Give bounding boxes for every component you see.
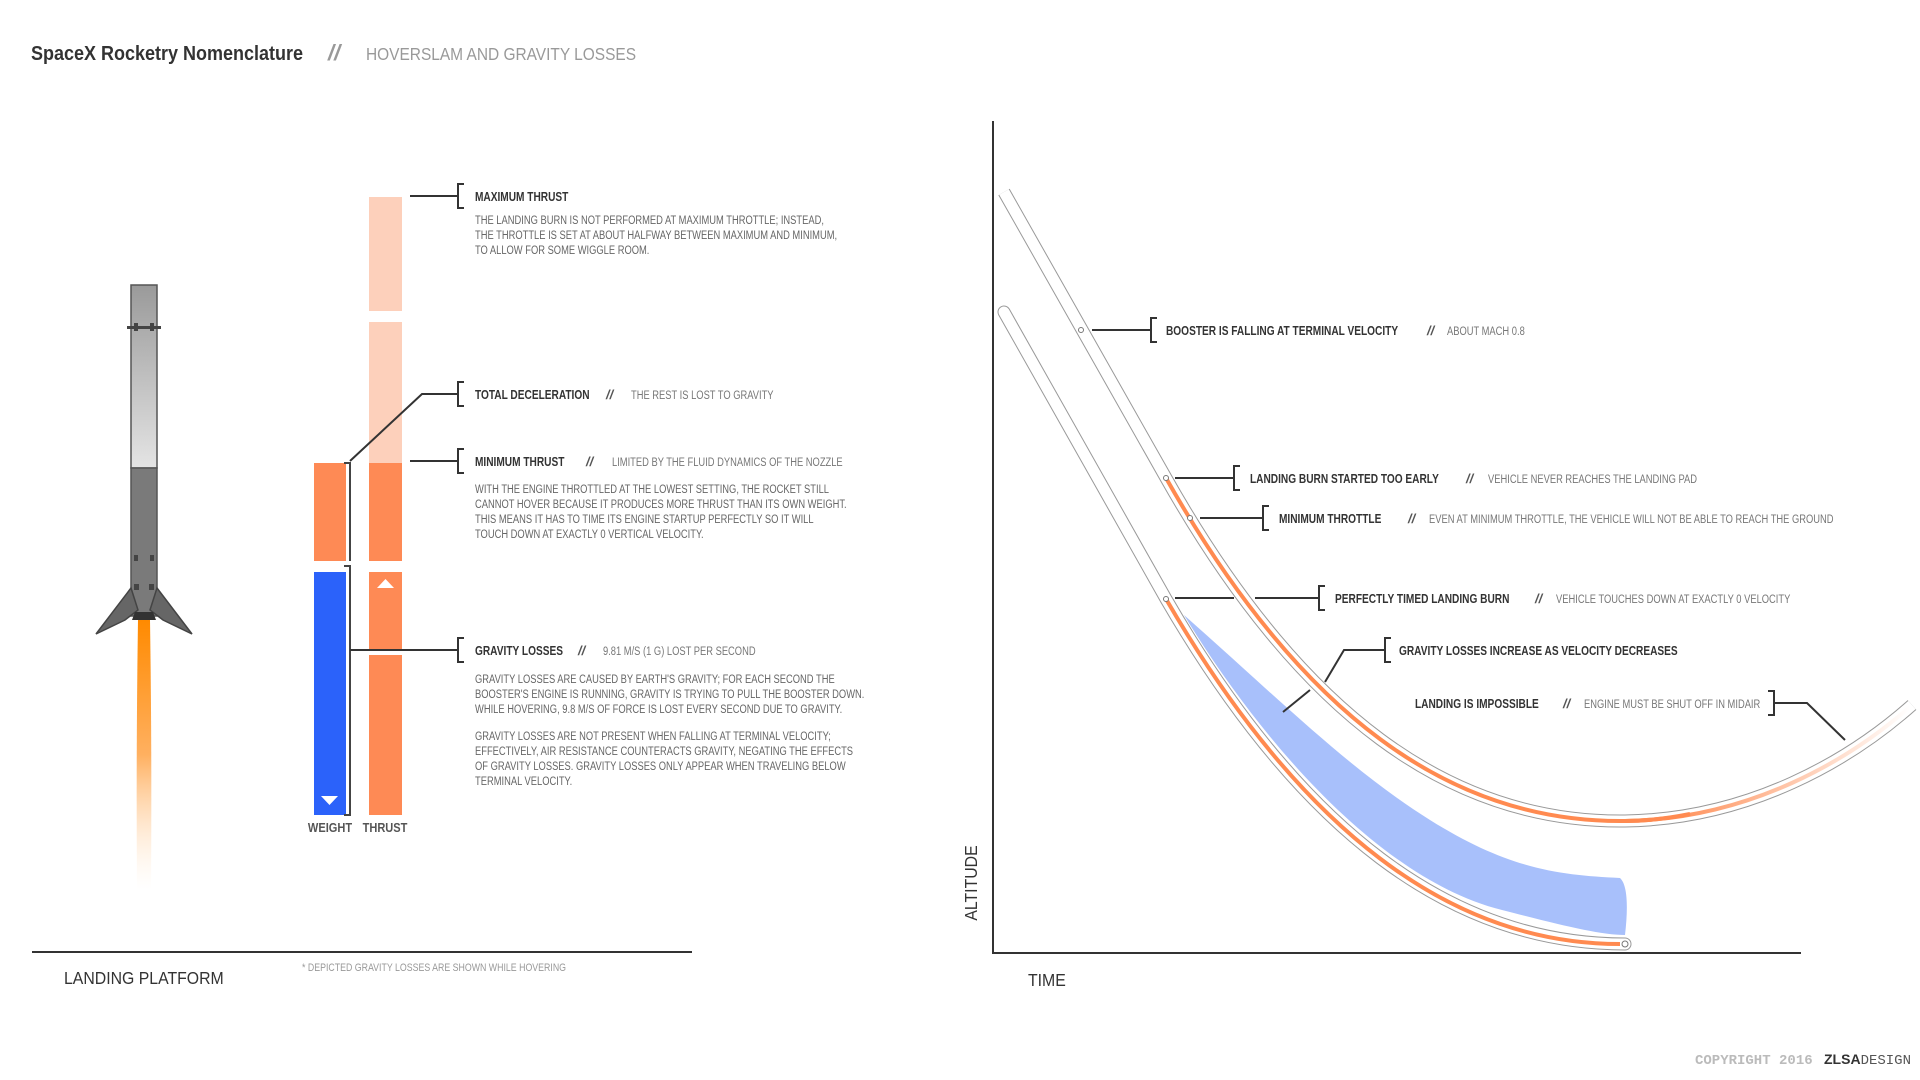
callout: minimum throttle: EVEN AT MINIMUM THROTTLE, THE VEHICLE WILL NOT BE ABLE TO REACH THE GROUND: [1429, 513, 1834, 526]
callout: gravity losses increase: GRAVITY LOSSES INCREASE AS VELOCITY DECREASES: [1399, 644, 1678, 658]
gravity loss area: [1184, 615, 1627, 935]
callout: booster terminal velocity: ABOUT MACH 0.8: [1447, 325, 1525, 338]
thrust column: [369, 197, 402, 815]
callout: total deceleration: THE REST IS LOST TO GRAVITY: [631, 389, 774, 402]
callout: maximum thrust: THE LANDING BURN IS NOT PERFORMED AT MAXIMUM THROTTLE; INSTEAD,: [475, 214, 824, 227]
callout: minimum throttle: MINIMUM THROTTLE: [1279, 512, 1382, 526]
callout: gravity losses: TERMINAL VELOCITY.: [475, 775, 572, 788]
callout: landing burn too early: VEHICLE NEVER REACHES THE LANDING PAD: [1488, 473, 1697, 486]
callout: landing burn too early: LANDING BURN STARTED TOO EARLY: [1250, 472, 1439, 486]
callout: minimum thrust: LIMITED BY THE FLUID DYNAMICS OF THE NOZZLE: [612, 456, 843, 469]
chart: altitude vs time: [961, 121, 1912, 990]
callout: booster terminal velocity: //: [1426, 323, 1436, 338]
callout: landing is impossible: [1415, 691, 1845, 740]
bar chart: weight vs thrust: THRUST: [363, 820, 408, 835]
copyright: ZLSADESIGN: [1824, 1051, 1911, 1069]
callout: landing is impossible: LANDING IS IMPOSSIBLE: [1415, 697, 1539, 711]
axes: [993, 121, 1801, 953]
callout: gravity losses: OF GRAVITY LOSSES. GRAVITY LOSSES ONLY APPEAR WHEN TRAVELING BELOW: [475, 760, 846, 773]
label: landing platform: LANDING PLATFORM: [64, 968, 224, 988]
axis label: altitude: ALTITUDE: [961, 845, 981, 921]
callout: booster terminal velocity: BOOSTER IS FALLING AT TERMINAL VELOCITY: [1166, 324, 1398, 338]
footnote: * DEPICTED GRAVITY LOSSES ARE SHOWN WHILE HOVERING: [302, 962, 566, 974]
callout: gravity losses: GRAVITY LOSSES ARE NOT PRESENT WHEN FALLING AT TERMINAL VELOCITY;: [475, 730, 831, 743]
callout: gravity losses: EFFECTIVELY, AIR RESISTANCE COUNTERACTS GRAVITY, NEGATING THE EFFECTS: [475, 745, 853, 758]
callout: minimum thrust: MINIMUM THRUST: [475, 455, 564, 469]
callout: maximum thrust: THE THROTTLE IS SET AT ABOUT HALFWAY BETWEEN MAXIMUM AND MINIMUM,: [475, 229, 837, 242]
callout: minimum throttle: [1200, 506, 1834, 530]
callout: gravity losses: GRAVITY LOSSES ARE CAUSED BY EARTH'S GRAVITY; FOR EACH SECOND THE: [475, 673, 835, 686]
curve A: landing too early / impossible: [1004, 192, 1912, 821]
callout: gravity losses: 9.81 M/S (1 G) LOST PER SECOND: [603, 645, 756, 658]
callout: booster terminal velocity: [1092, 318, 1525, 342]
callout: maximum thrust: MAXIMUM THRUST: [475, 190, 568, 204]
callout: landing is impossible: //: [1562, 696, 1572, 711]
callout: gravity losses: WHILE HOVERING, 9.8 M/S OF FORCE IS LOST EVERY SECOND DUE TO GRAVITY.: [475, 703, 842, 716]
callout: gravity losses: GRAVITY LOSSES: [475, 644, 563, 658]
callout: minimum thrust: [410, 449, 847, 541]
callout: perfectly timed landing burn: [1175, 586, 1790, 610]
copyright: COPYRIGHT 2016: [1695, 1053, 1813, 1069]
labels: weight/thrust: WEIGHT: [308, 820, 353, 835]
callout: total deceleration: //: [605, 387, 615, 402]
callout: total deceleration: TOTAL DECELERATION: [475, 388, 590, 402]
callout: minimum thrust: THIS MEANS IT HAS TO TIME ITS ENGINE STARTUP PERFECTLY SO IT WILL: [475, 513, 814, 526]
callout: landing is impossible: ENGINE MUST BE SHUT OFF IN MIDAIR: [1584, 698, 1760, 711]
callout: minimum thrust: //: [585, 454, 595, 469]
callout: minimum thrust: WITH THE ENGINE THROTTLED AT THE LOWEST SETTING, THE ROCKET STILL: [475, 483, 829, 496]
title: [31, 40, 636, 65]
title: HOVERSLAM AND GRAVITY LOSSES: [366, 44, 636, 64]
rocket illustration: [96, 209, 192, 890]
callout: minimum thrust: CANNOT HOVER BECAUSE IT PRODUCES MORE THRUST THAN ITS OWN WEIGHT.: [475, 498, 847, 511]
copyright: [1695, 1051, 1911, 1069]
flame: [137, 620, 151, 890]
title: SpaceX Rocketry Nomenclature: [31, 43, 303, 65]
callout: perfectly timed landing burn: //: [1534, 591, 1544, 606]
callout: gravity losses: //: [577, 643, 587, 658]
curve B: perfectly timed: [1004, 312, 1628, 947]
title: //: [327, 40, 343, 65]
callout: maximum thrust: TO ALLOW FOR SOME WIGGLE ROOM.: [475, 244, 649, 257]
callout: landing burn too early: [1175, 466, 1697, 490]
callout: landing burn too early: //: [1465, 471, 1475, 486]
callout: gravity losses increase: [1283, 638, 1678, 712]
callout: minimum thrust: TOUCH DOWN AT EXACTLY 0 VERTICAL VELOCITY.: [475, 528, 704, 541]
ground line: [32, 951, 692, 953]
callout: maximum thrust: [410, 184, 837, 257]
callout: minimum throttle: //: [1407, 511, 1417, 526]
callout: gravity losses: [350, 638, 864, 788]
callout: perfectly timed landing burn: PERFECTLY TIMED LANDING BURN: [1335, 592, 1509, 606]
axis label: time: TIME: [1028, 970, 1066, 990]
bar chart: weight vs thrust: [308, 197, 408, 835]
callout: gravity losses: BOOSTER'S ENGINE IS RUNNING, GRAVITY IS TRYING TO PULL THE BOOSTER DOWN.: [475, 688, 864, 701]
weight column: [314, 463, 346, 815]
callout: total deceleration: [350, 382, 774, 461]
callout: perfectly timed landing burn: VEHICLE TOUCHES DOWN AT EXACTLY 0 VELOCITY: [1556, 593, 1790, 606]
